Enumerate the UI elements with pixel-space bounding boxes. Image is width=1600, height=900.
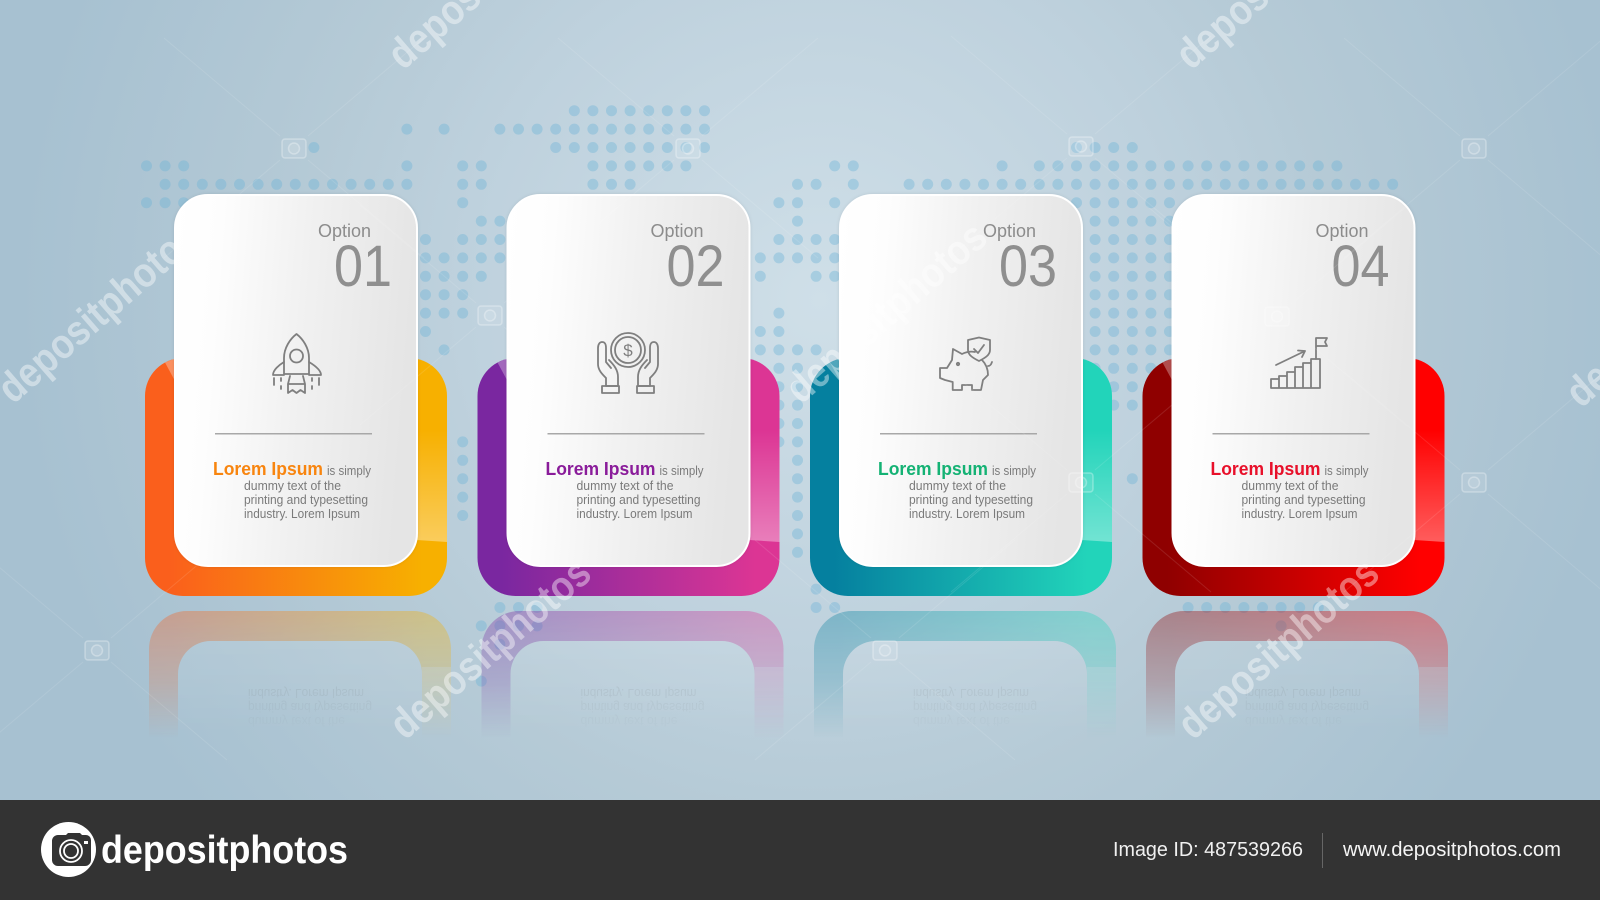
reflection 02: printing and typesetting bbox=[580, 700, 705, 714]
text block 02: printing and typesetting bbox=[576, 493, 701, 507]
panel: option 03 bbox=[810, 195, 1112, 596]
watermark text: depositphotos bbox=[1168, 548, 1388, 748]
reflection 04: industry. Lorem Ipsum bbox=[1245, 686, 1361, 700]
text block 04: printing and typesetting bbox=[1242, 493, 1366, 507]
divider 03 bbox=[880, 433, 1037, 434]
option label 04: Option bbox=[1316, 221, 1368, 241]
option label 02: Option bbox=[650, 221, 704, 241]
text block 02: dummy text of the bbox=[576, 479, 674, 493]
reflections of the four panels bbox=[149, 611, 1448, 728]
text block 01: is simply bbox=[327, 464, 372, 478]
reflection 01: industry. Lorem Ipsum bbox=[248, 686, 364, 700]
text block 04 bbox=[1210, 459, 1369, 521]
back shape 03 bbox=[810, 358, 1112, 596]
reflection 04: dummy text of the bbox=[1245, 714, 1342, 728]
number 04: 04 bbox=[1332, 234, 1390, 299]
text block 02: is simply bbox=[660, 464, 704, 478]
reflection 03: industry. Lorem Ipsum bbox=[913, 686, 1029, 700]
corner highlight 03 bbox=[830, 358, 840, 381]
back shape 01 bbox=[145, 358, 447, 596]
text block 02: Lorem Ipsum bbox=[546, 459, 656, 479]
number 03: 03 bbox=[999, 234, 1057, 299]
number 02: 02 bbox=[666, 234, 724, 299]
icon: rocket bbox=[273, 334, 321, 393]
footer bar bbox=[0, 800, 1600, 900]
icon: growth chart with flag bbox=[1271, 338, 1327, 388]
reflection 02: dummy text of the bbox=[580, 714, 678, 728]
corner highlight 01 bbox=[165, 358, 175, 381]
text block 04: Lorem Ipsum bbox=[1210, 459, 1320, 479]
divider 04 bbox=[1212, 433, 1370, 434]
icon: hands holding coin bbox=[598, 333, 658, 393]
text block 03 bbox=[878, 459, 1037, 521]
reflection 03: printing and typesetting bbox=[913, 700, 1037, 714]
reflection 01: dummy text of the bbox=[248, 714, 345, 728]
card 03 bbox=[840, 195, 1082, 566]
text block 04: dummy text of the bbox=[1242, 479, 1339, 493]
text block 03: is simply bbox=[992, 464, 1037, 478]
back shape 04 bbox=[1142, 358, 1444, 596]
reflection 04: printing and typesetting bbox=[1245, 700, 1369, 714]
icon: piggy bank with shield bbox=[940, 338, 992, 390]
watermark camera marks bbox=[85, 137, 1486, 660]
text block 02: industry. Lorem Ipsum bbox=[576, 507, 692, 521]
text block 01: Lorem Ipsum bbox=[213, 459, 323, 479]
text block 01: printing and typesetting bbox=[244, 493, 368, 507]
divider 01 bbox=[215, 433, 372, 434]
card 02 bbox=[508, 195, 750, 566]
reflection 03 bbox=[814, 611, 1116, 726]
reflection 02 bbox=[482, 611, 784, 724]
text block 02 bbox=[546, 459, 704, 521]
panel: option 04 bbox=[1142, 195, 1444, 596]
icon: footer camera logo bbox=[41, 822, 96, 877]
reflection 02: industry. Lorem Ipsum bbox=[580, 686, 696, 700]
panel: option 02 bbox=[478, 195, 780, 596]
text block 03: printing and typesetting bbox=[909, 493, 1033, 507]
gloss 02 bbox=[750, 430, 780, 542]
text block 04: is simply bbox=[1324, 464, 1369, 478]
text block 03: industry. Lorem Ipsum bbox=[909, 507, 1025, 521]
text block 03: dummy text of the bbox=[909, 479, 1006, 493]
reflection 01: printing and typesetting bbox=[248, 700, 372, 714]
dotted world map bbox=[146, 111, 1393, 681]
gloss 01 bbox=[417, 430, 447, 542]
text block 01: dummy text of the bbox=[244, 479, 341, 493]
panel: option 01 bbox=[145, 195, 447, 596]
option label 01: Option bbox=[318, 221, 371, 241]
text block 04: industry. Lorem Ipsum bbox=[1242, 507, 1358, 521]
footer logo text: depositphotos bbox=[101, 829, 348, 872]
corner highlight 04 bbox=[1162, 358, 1172, 381]
number 01: 01 bbox=[334, 234, 392, 299]
back shape 02 bbox=[478, 358, 780, 596]
watermark text: depositphotos bbox=[776, 212, 996, 412]
corner highlight 02 bbox=[498, 358, 508, 381]
watermark text: depositphotos bbox=[380, 548, 600, 748]
reflection 03: dummy text of the bbox=[913, 714, 1010, 728]
website: www.depositphotos.com bbox=[1342, 839, 1561, 861]
text block 01: industry. Lorem Ipsum bbox=[244, 507, 360, 521]
card 04 bbox=[1172, 195, 1414, 566]
option label 03: Option bbox=[983, 221, 1036, 241]
text block 01 bbox=[213, 459, 372, 521]
gloss 03 bbox=[1082, 430, 1112, 542]
reflection 01 bbox=[149, 611, 451, 726]
card 01 bbox=[175, 195, 417, 566]
icon: hands holding coin: $ bbox=[623, 341, 633, 360]
gloss 04 bbox=[1414, 430, 1444, 542]
divider 02 bbox=[548, 433, 704, 434]
image id: Image ID: 487539266 bbox=[1113, 839, 1303, 861]
text block 03: Lorem Ipsum bbox=[878, 459, 988, 479]
reflection 04 bbox=[1146, 611, 1448, 728]
